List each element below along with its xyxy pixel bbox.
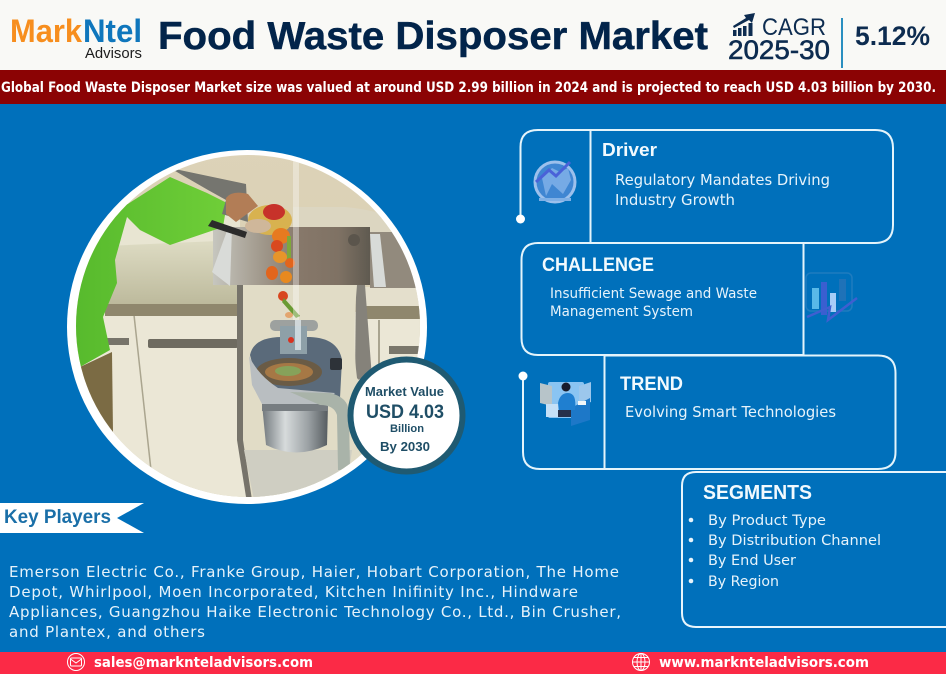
callout: market value: Billion [390,423,424,435]
key players ribbon: Key Players [4,507,111,528]
trend text: TREND [620,374,683,395]
rim and sink [299,207,392,232]
sleeve and arm [76,177,226,366]
panel: driver: Regulatory Mandates Driving [615,171,830,189]
CAGR label: 2025-30 [728,35,830,65]
panel: driver [516,130,893,243]
icon: growth chart [733,13,755,36]
logo: MarkNtel Advisors [10,13,142,62]
icon: globe with growth arrow [535,162,575,202]
CAGR label [728,14,830,65]
segments list [689,513,881,590]
challenge text: CHALLENGE [542,255,654,276]
panel: segments [682,472,946,627]
cabinets [81,312,420,497]
driver text: Driver [602,139,657,160]
icon: bar chart [806,273,857,320]
panel: challenge [522,243,857,355]
water stream [293,160,299,335]
segments list: By Region [708,574,779,590]
callout: market value: Market Value [365,384,444,399]
callout: market value: By 2030 [380,440,430,454]
panel: driver: Industry Growth [615,191,735,209]
key players list [9,563,621,641]
footer bar [0,652,946,674]
icon: email [68,654,84,670]
logo: MarkNtel Advisors: Mark [10,13,82,49]
summary band [0,70,946,104]
falling food [245,204,300,318]
cutaway panel [237,285,252,497]
segments list: By End User [708,553,796,569]
key players list: and Plantex, and others [9,623,205,641]
email address: sales@marknteladvisors.com [94,655,313,671]
icon: person with dashboards [540,382,591,426]
segments heading: SEGMENTS [703,482,812,504]
callout: market value [350,360,462,472]
panel: challenge: Management System [550,304,693,320]
countertop [105,240,240,306]
CAGR label: CAGR [762,14,826,41]
segments list: By Distribution Channel [708,533,881,549]
panel: trend [518,356,896,469]
panel: trend: Evolving Smart Technologies [625,403,836,421]
website address: www.marknteladvisors.com [659,655,869,671]
logo: MarkNtel Advisors: Ntel [83,13,142,49]
disposer unit [249,320,350,470]
panel: challenge: Insufficient Sewage and Waste [550,286,757,302]
board and hand [170,168,248,222]
icon: globe [632,654,650,670]
photo: food waste disposer in kitchen [67,150,427,504]
logo: MarkNtel Advisors: Advisors [85,45,142,62]
key players ribbon [0,503,144,533]
segments list: By Product Type [708,513,826,529]
key players list: Appliances, Guangzhou Haike Electronic Technology Co., Ltd., Bin Crusher, [9,603,621,621]
CAGR value: 5.12% [855,21,930,51]
callout: market value: USD 4.03 [366,402,444,423]
key players list: Depot, Whirlpool, Moen Incorporated, Kitchen Inifinity Inc., Hindware [9,583,578,601]
title: Food Waste Disposer Market [158,15,708,58]
key players list: Emerson Electric Co., Franke Group, Haier, Hobart Corporation, The Home [9,563,619,581]
header bar [0,0,946,70]
